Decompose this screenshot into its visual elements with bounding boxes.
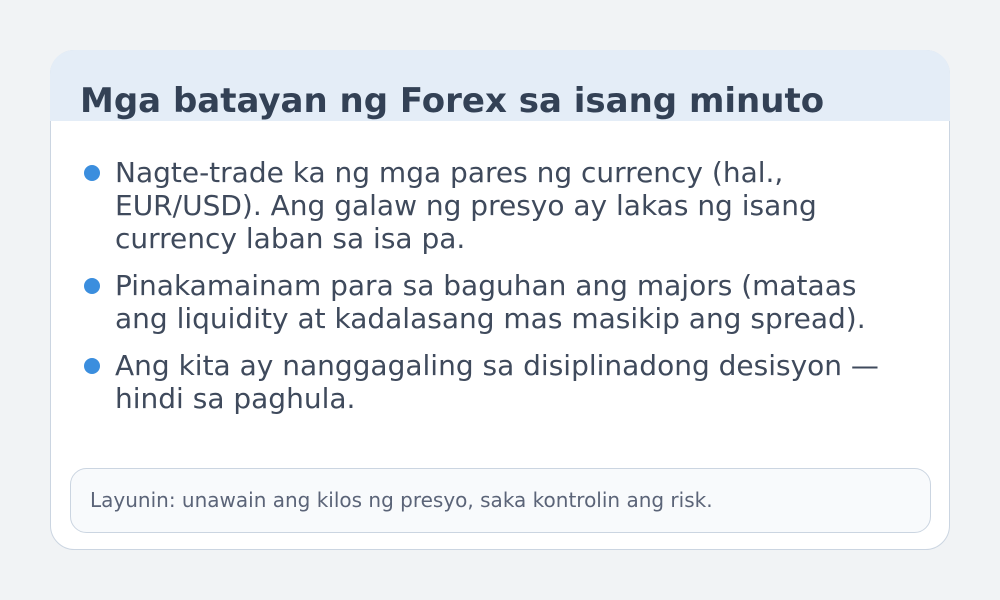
header band <box>50 50 950 121</box>
footer note <box>70 468 930 532</box>
bullet 3: hindi sa paghula. <box>115 382 355 415</box>
bullet 3 <box>84 349 879 415</box>
bullet 1: currency laban sa isa pa. <box>115 222 465 255</box>
bullet 1: Nagte-trade ka ng mga pares ng currency (hal., <box>115 156 783 189</box>
bullet 3: Ang kita ay nanggagaling sa disiplinadong desisyon — <box>115 349 879 382</box>
bullet 2: Pinakamainam para sa baguhan ang majors (mataas <box>115 269 856 302</box>
title: Mga batayan ng Forex sa isang minuto <box>80 81 824 121</box>
bullet 1: EUR/USD). Ang galaw ng presyo ay lakas ng isang <box>115 189 817 222</box>
footer note: Layunin: unawain ang kilos ng presyo, saka kontrolin ang risk. <box>90 488 713 512</box>
card <box>50 50 950 550</box>
bullet 2: ang liquidity at kadalasang mas masikip ang spread). <box>115 302 866 335</box>
bullet 1 <box>84 156 817 255</box>
bullet 2 <box>84 269 866 335</box>
